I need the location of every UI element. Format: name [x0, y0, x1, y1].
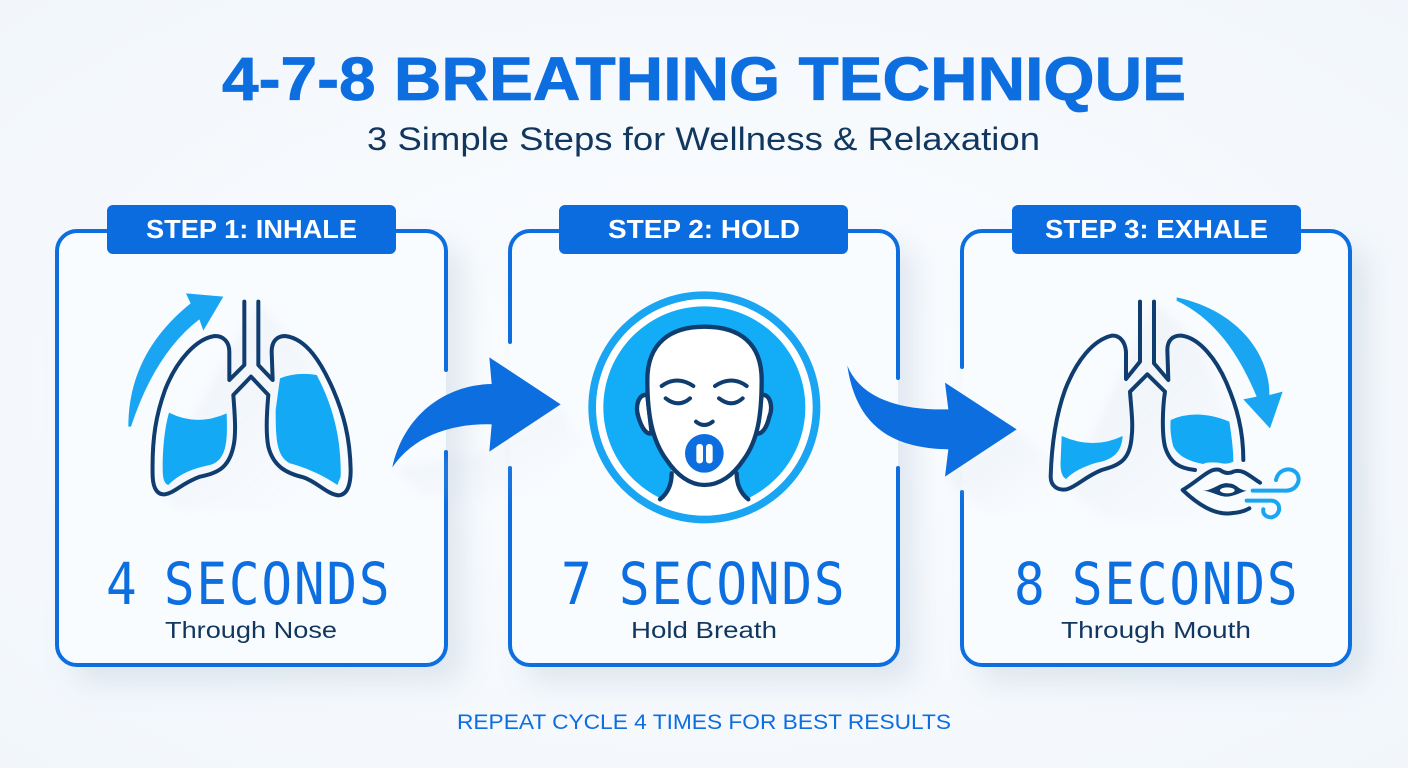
step badge	[559, 205, 848, 254]
caption: Through Nose	[165, 617, 337, 643]
panel: step 2 hold	[510, 205, 916, 684]
footer note: REPEAT CYCLE 4 TIMES FOR BEST RESULTS	[457, 710, 951, 734]
icon: lungs with exhale arrow and lips	[1051, 297, 1307, 520]
arrow: step 1 to step 2	[392, 357, 583, 497]
step badge: STEP 2: HOLD	[608, 214, 800, 244]
title: 4-7-8 BREATHING TECHNIQUE	[222, 45, 1186, 113]
step badge	[1012, 205, 1301, 254]
panel: step 1 inhale	[57, 205, 464, 684]
step badge: STEP 1: INHALE	[146, 214, 357, 244]
icon: face holding breath	[588, 291, 820, 523]
caption: Through Mouth	[1061, 617, 1251, 643]
duration: 7 SECONDS	[561, 550, 846, 618]
panel: step 3 exhale	[962, 205, 1369, 684]
subtitle: 3 Simple Steps for Wellness & Relaxation	[367, 121, 1040, 157]
icon: lungs with inhale arrow	[128, 293, 353, 510]
caption: Hold Breath	[631, 617, 777, 643]
step badge	[107, 205, 396, 254]
arrow: step 2 to step 3	[847, 366, 1057, 513]
duration: 8 SECONDS	[1014, 550, 1299, 618]
step badge: STEP 3: EXHALE	[1045, 214, 1268, 244]
duration: 4 SECONDS	[106, 550, 391, 618]
